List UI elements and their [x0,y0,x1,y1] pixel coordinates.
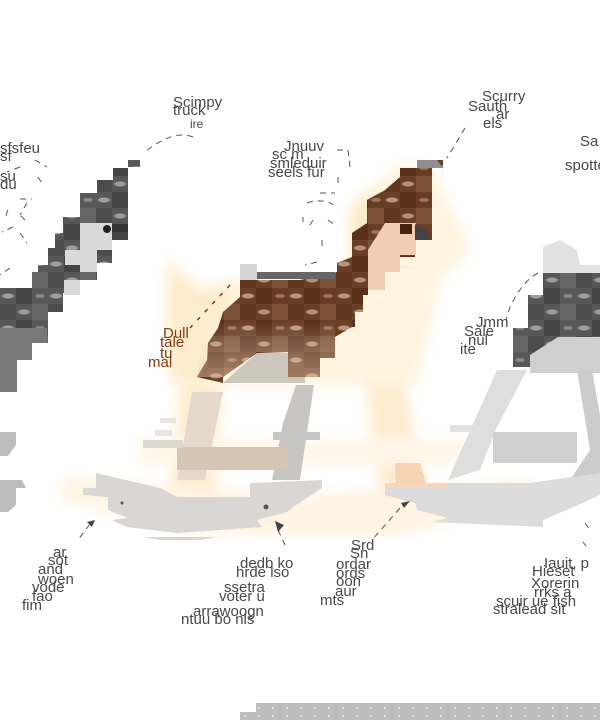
caption: center: sc m [272,146,304,163]
caption: bottom right: stralead sit [493,601,566,618]
caption: center: Jnuuv [284,138,325,155]
caption: right body: ite [460,341,476,358]
right deer body [513,273,600,373]
center rocker [83,473,322,533]
gray band at top of body [257,272,335,279]
left gray deer [0,160,140,512]
light patch by band [240,264,257,280]
center crossbar [177,447,287,470]
left deer body [0,160,140,392]
caption: bottom right middle: ords [336,565,365,582]
center deer cream halo [62,165,530,535]
caption: far left: sfsfeu [0,140,40,157]
caption: bottom left: and [38,561,63,578]
right front leg [448,370,527,480]
center deer [83,160,480,540]
left deer lower rocker pieces [0,432,26,512]
crossbar upper piece [143,440,183,448]
caption: tail [148,325,189,371]
caption: center [268,138,327,181]
right crossbar [493,432,577,463]
right rear leg [570,370,600,480]
caption: far right [565,133,600,174]
center face [368,223,416,290]
right deer belly [530,337,600,373]
caption: bottom left: vode [32,579,65,596]
caption: bottom right: Iauit, p [544,555,589,572]
caption: top right: els [483,115,502,132]
caption: top right [468,88,526,132]
caption: center: seels fur [268,164,325,181]
center belly [223,353,305,383]
caption: right body [460,314,508,358]
caption: bottom right: Hieset [532,563,575,580]
caption: far left [0,140,40,193]
caption: bottom right middle: oon [336,573,361,590]
caption: far right: Sa [580,133,599,150]
caption: top right: Sauth [468,98,507,115]
caption: tail: Dull [163,325,189,342]
caption: bottom middle: hrde lso [236,564,289,581]
caption: bottom middle: arrawoogn [193,603,264,620]
right deer neck [543,240,600,273]
right gray deer [385,240,600,527]
caption: bottom right middle: aur [335,583,357,600]
center horn tip [417,160,443,168]
caption: bottom right: Xorerin [531,575,579,592]
caption: bottom middle: ntuu bo nls [181,611,254,628]
caption: top center: truck [173,102,206,119]
caption: far left: sf [0,148,12,165]
left deer nose [112,224,128,232]
caption: bottom left [22,544,74,614]
tail leader line [190,285,230,328]
center nose [415,224,430,240]
checker strip at bottom [240,703,600,720]
caption: bottom middle: ssetra [224,579,266,596]
caption: bottom right: scuir ue fish [496,593,576,610]
caption: top right: Scurry [482,88,526,105]
caption: top center: ire [190,117,204,131]
arrowhead: lower right [401,501,410,508]
caption: bottom right middle: Sn [350,545,368,562]
caption: bottom left: fim [22,597,42,614]
center eye [400,224,412,234]
caption: bottom right [493,555,589,618]
center screws [120,502,268,510]
caption: top center: Scimpy [173,94,223,111]
caption: tail: tale [160,334,184,351]
caption: right body: Jmm [476,314,508,331]
small upper rail [155,418,176,436]
left deer fur tail [0,328,47,392]
caption: tail: tu [160,345,173,362]
center far leg [272,385,314,480]
peach hoof [395,463,430,495]
caption: right body: nul [468,332,488,349]
caption: bottom middle: voter u [219,588,265,605]
caption: bottom right middle [320,537,374,609]
caption: bottom left: sot [48,552,69,569]
caption: bottom middle: dedb ko [240,555,293,572]
caption: bottom left: woen [37,571,74,588]
center rear leg [177,392,223,480]
arrowhead: lower middle [275,521,284,532]
left deer eye [103,225,111,233]
right crossbar stub [273,432,320,440]
caption: bottom right middle: ordar [336,556,371,573]
caption: top right: ar [496,106,509,123]
caption: bottom left: fao [32,588,53,605]
lighter lower body wash [197,320,335,377]
dashed leader lines [0,128,590,546]
caption: far left: su [0,168,16,185]
caption: bottom right middle: Srd [351,537,374,554]
caption: center: smleduir [270,155,327,172]
arrowhead: lower left [87,520,95,527]
caption: bottom left: ar [53,544,66,561]
caption: tail: mal [148,354,172,371]
rocker lower arc [143,537,217,540]
caption: bottom middle [181,555,293,628]
center body and head [197,160,443,383]
caption: right body: Sale [464,323,494,340]
caption: top center [173,94,223,131]
caption: bottom right: rrks a [534,584,572,601]
right upper rail [450,425,480,432]
caption: bottom right middle: mts [320,592,344,609]
right rocker [385,473,600,527]
left deer face [64,223,112,295]
caption: far left: du [0,176,17,193]
peach rail [385,483,480,495]
